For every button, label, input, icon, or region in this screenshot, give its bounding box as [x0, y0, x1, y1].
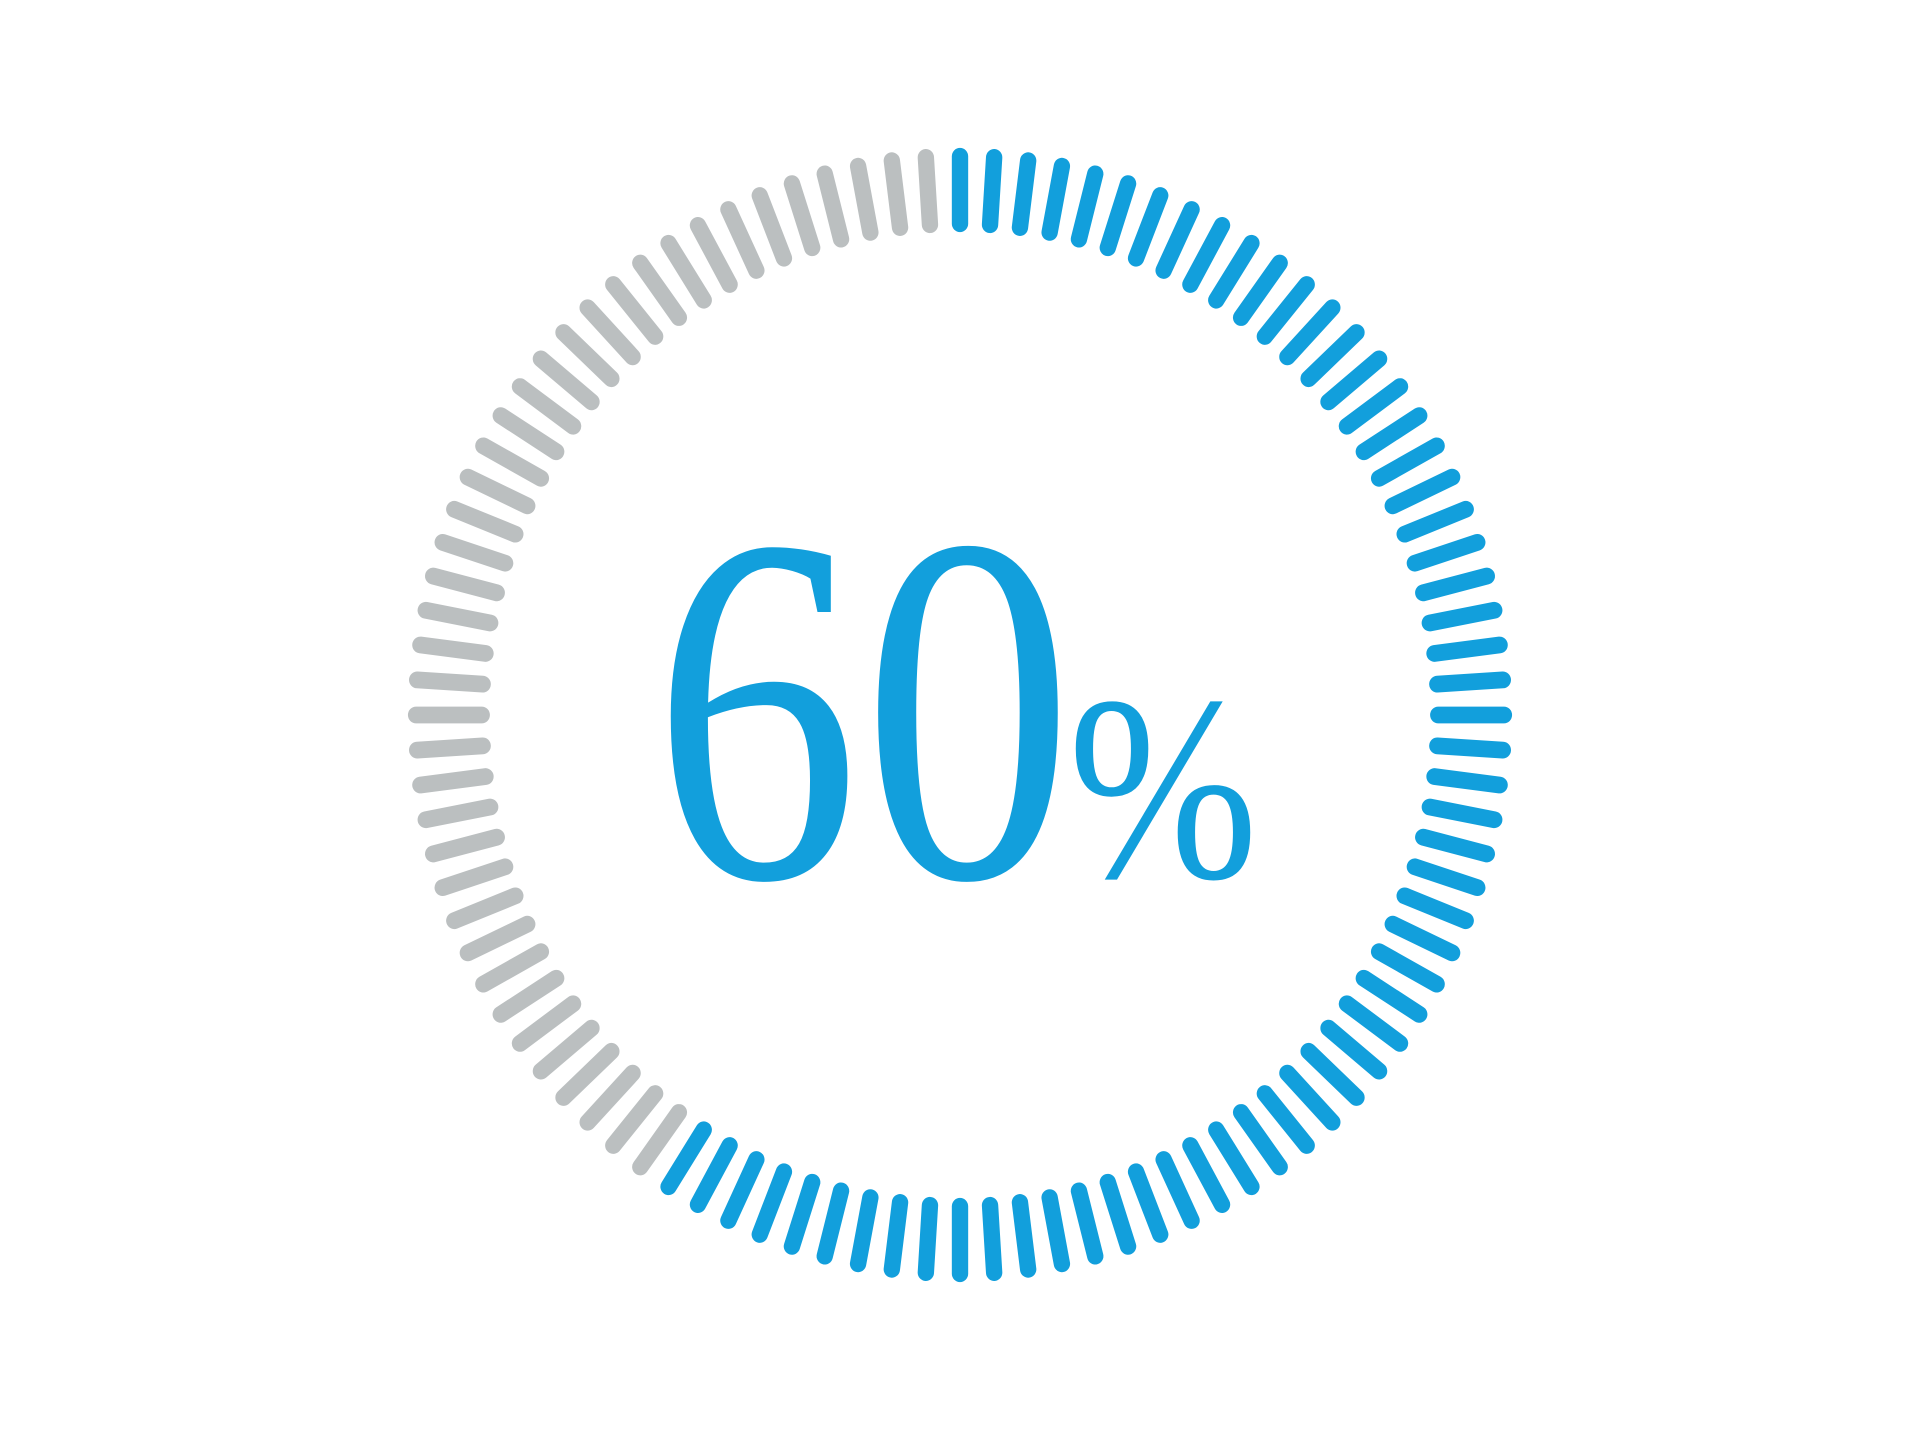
filled ticks: 60 blue	[669, 156, 1567, 1343]
radial gauge ring	[353, 87, 1567, 1343]
digit 0: 0	[862, 434, 1074, 986]
remaining ticks: 40 gray	[353, 87, 958, 1167]
central value: 60%	[653, 433, 1258, 986]
digit 6: 6	[653, 433, 860, 985]
percent sign: %	[1068, 643, 1258, 935]
